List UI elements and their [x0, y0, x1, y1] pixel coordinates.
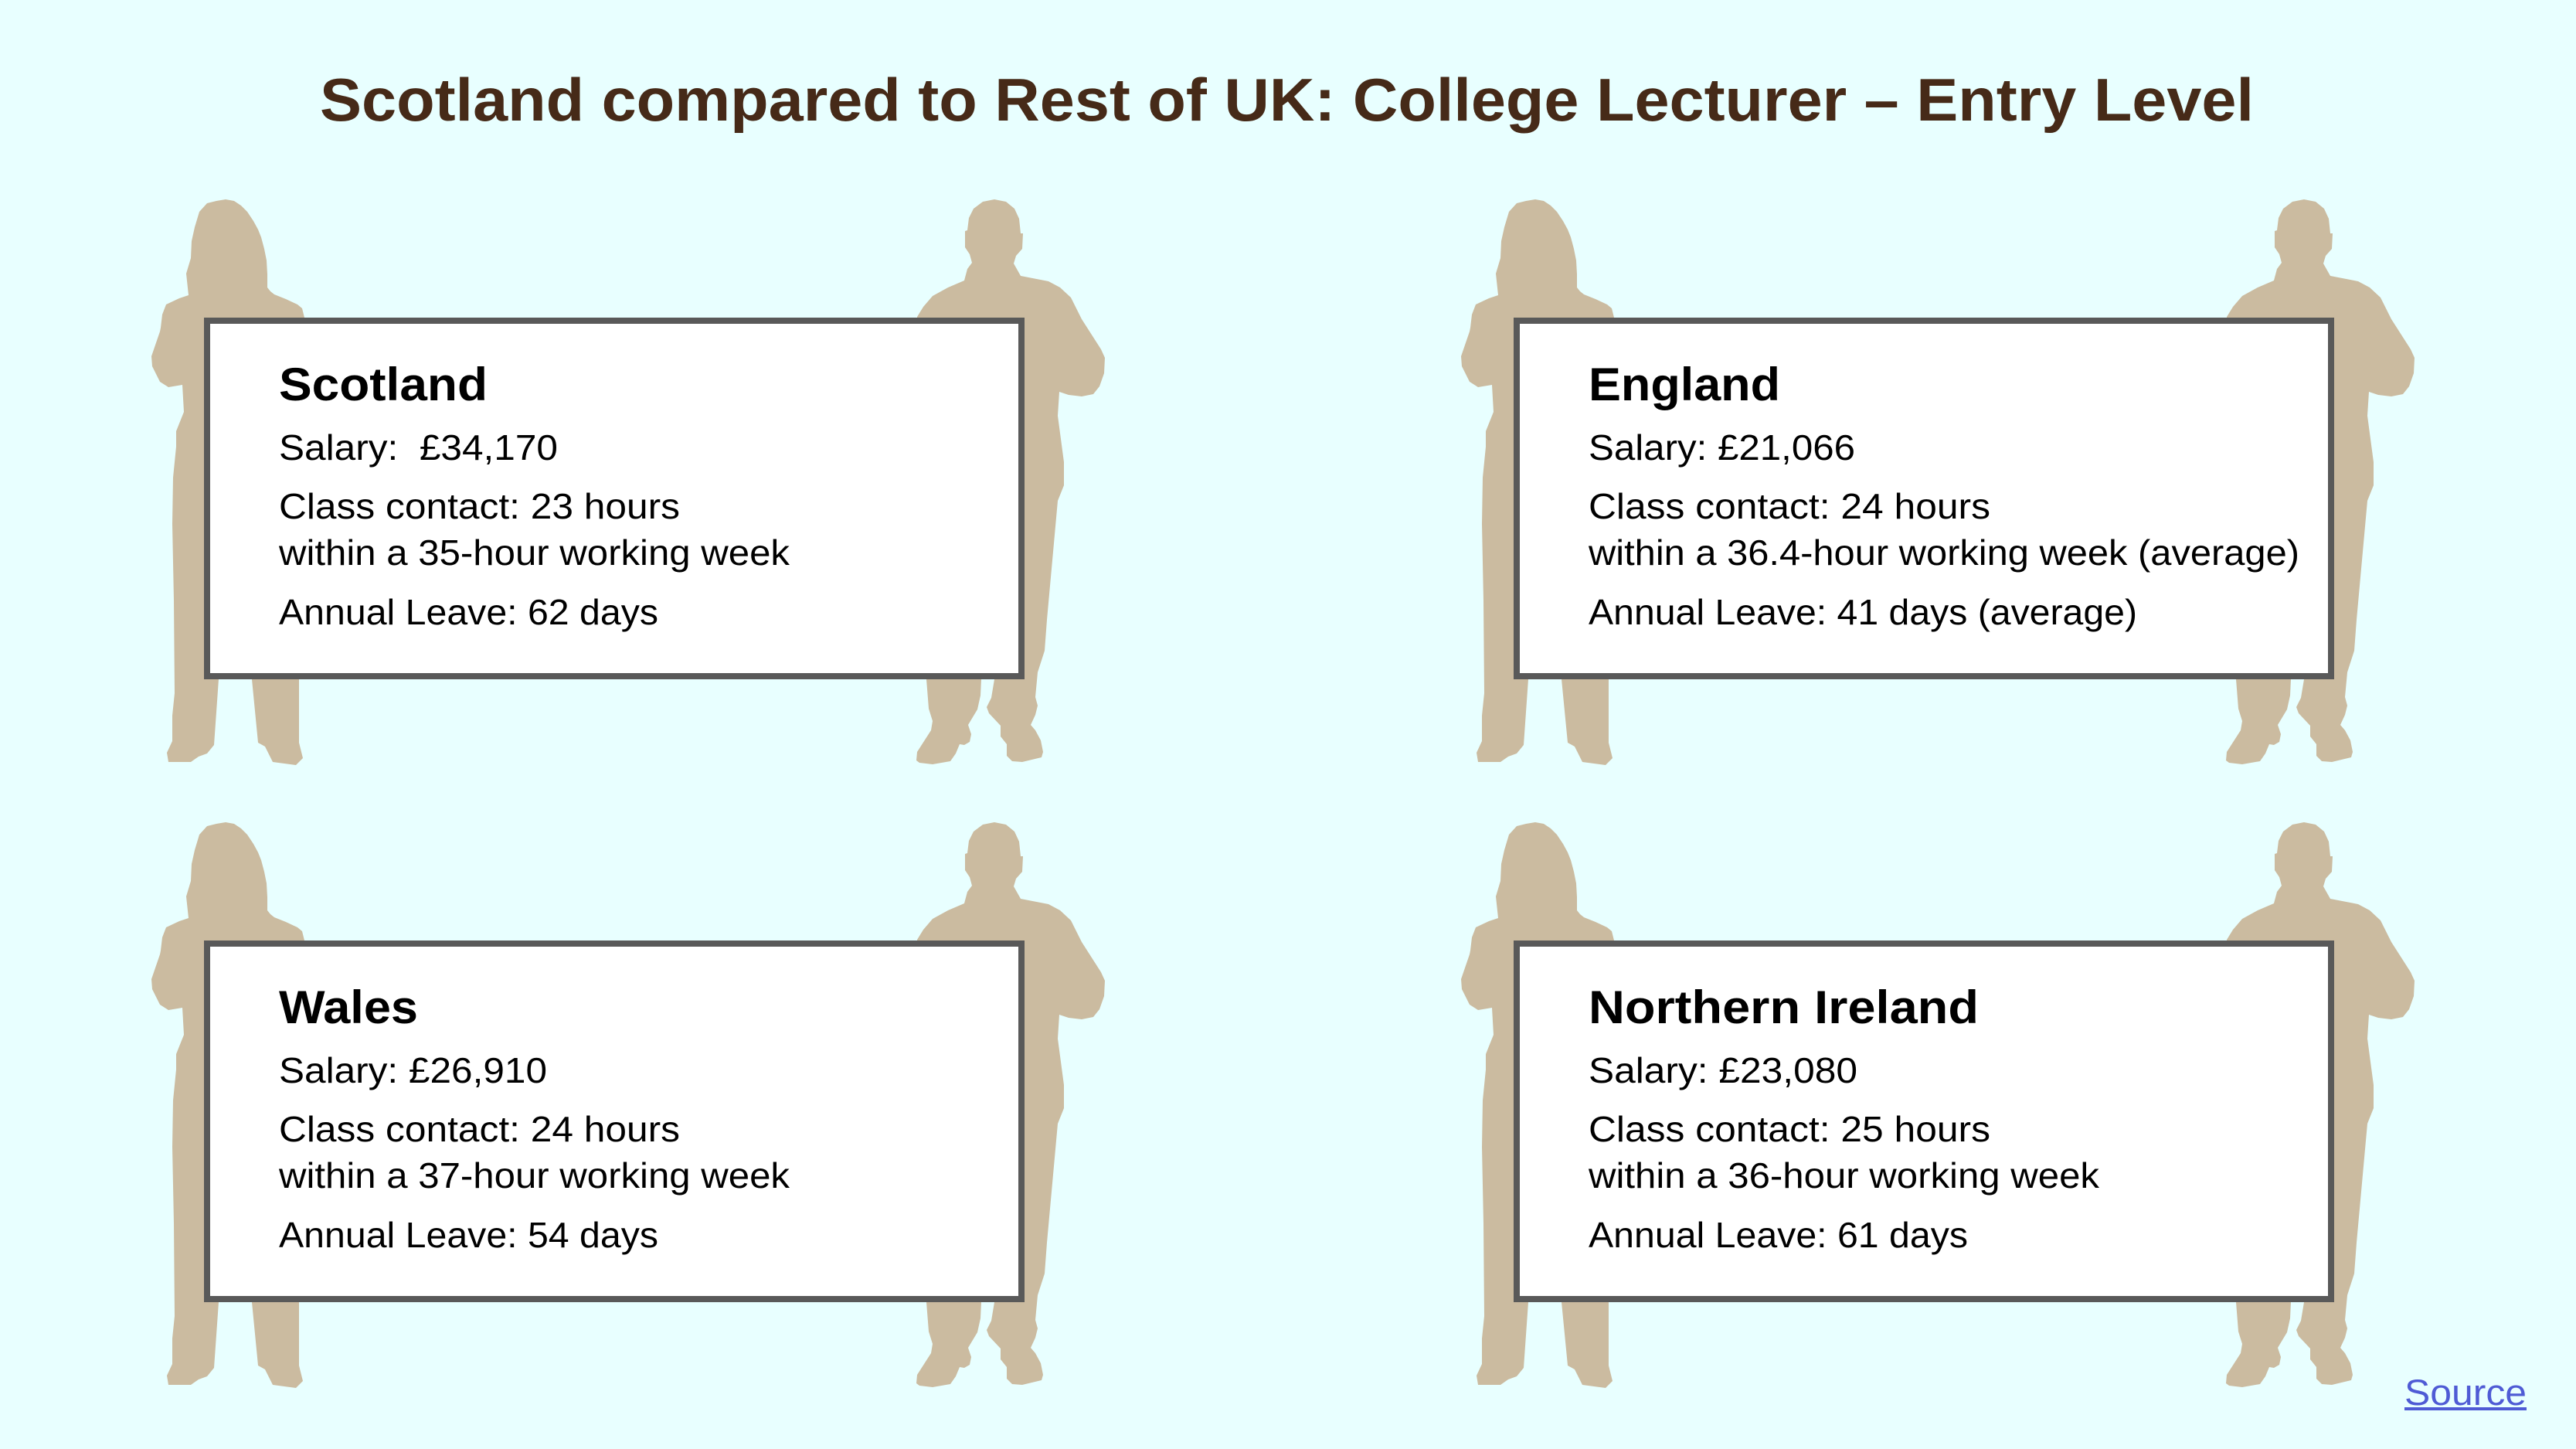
- annual leave: Annual Leave: 61 days: [1589, 1215, 1968, 1255]
- icon: woman silhouette: [151, 822, 304, 1388]
- panel: Scotland: [151, 199, 1105, 765]
- heading: Northern Ireland: Northern Ireland: [1589, 981, 1979, 1033]
- sign board: [1517, 321, 2331, 676]
- salary: Salary: £34,170: [279, 427, 558, 468]
- salary: Salary: £21,066: [1589, 427, 1855, 468]
- title: Scotland compared to Rest of UK: College Lecturer – Entry Level: [320, 66, 2254, 134]
- heading: England: England: [1589, 359, 1780, 410]
- icon: woman silhouette: [151, 199, 304, 765]
- working week: within a 36-hour working week: [1588, 1155, 2100, 1196]
- heading: Wales: Wales: [279, 981, 418, 1033]
- source link: Source: [2404, 1372, 2527, 1413]
- class contact: Class contact: 25 hours: [1589, 1109, 1990, 1149]
- panel: England: [1461, 199, 2415, 765]
- heading: Scotland: Scotland: [279, 359, 488, 410]
- working week: within a 35-hour working week: [278, 532, 790, 573]
- class contact: Class contact: 24 hours: [1589, 486, 1990, 526]
- icon: man silhouette: [916, 199, 1105, 764]
- salary: Salary: £26,910: [279, 1050, 547, 1090]
- working week: within a 37-hour working week: [278, 1155, 790, 1196]
- class contact: Class contact: 24 hours: [279, 1109, 680, 1149]
- panel: Wales: [151, 822, 1105, 1388]
- icon: man silhouette: [2226, 822, 2415, 1387]
- icon: woman silhouette: [1461, 822, 1614, 1388]
- sign board: [207, 944, 1021, 1299]
- annual leave: Annual Leave: 62 days: [279, 592, 658, 632]
- annual leave: Annual Leave: 41 days (average): [1589, 592, 2137, 632]
- sign board: [1517, 944, 2331, 1299]
- sign board: [207, 321, 1021, 676]
- class contact: Class contact: 23 hours: [279, 486, 680, 526]
- icon: woman silhouette: [1461, 199, 1614, 765]
- annual leave: Annual Leave: 54 days: [279, 1215, 658, 1255]
- panel: Northern Ireland: [1461, 822, 2415, 1388]
- icon: man silhouette: [916, 822, 1105, 1387]
- working week: within a 36.4-hour working week (average): [1588, 532, 2299, 573]
- icon: man silhouette: [2226, 199, 2415, 764]
- salary: Salary: £23,080: [1589, 1050, 1857, 1090]
